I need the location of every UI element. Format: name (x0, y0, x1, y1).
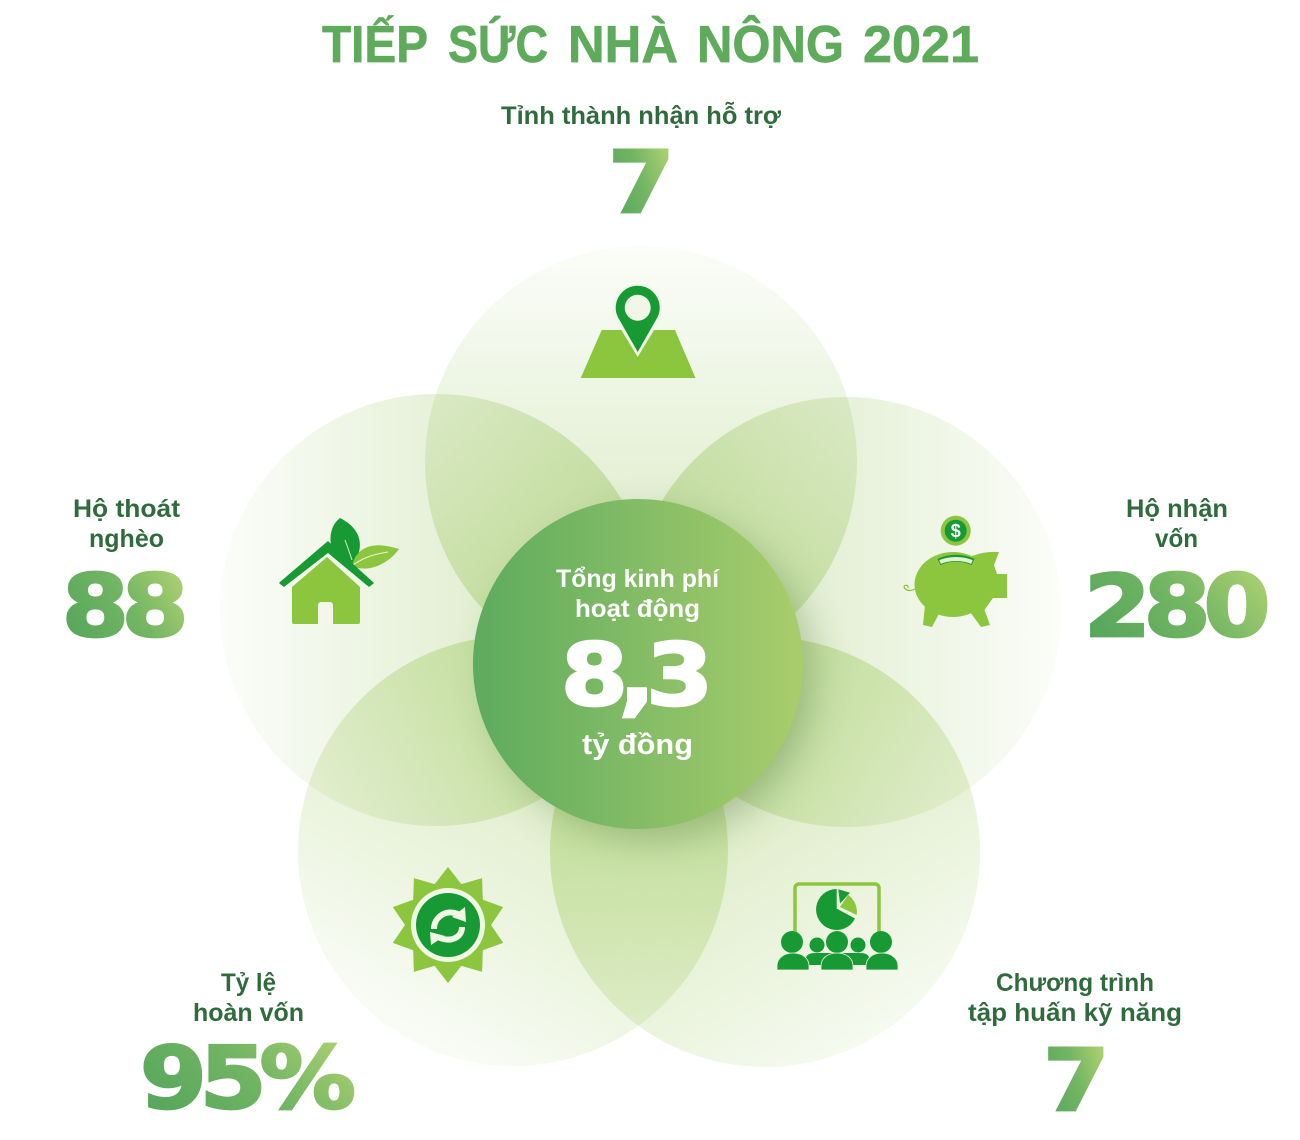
panel: total budget: hoạt động (575, 595, 700, 623)
stat: provinces supported: Tỉnh thành nhận hỗ trợ (501, 100, 781, 130)
icon: piggy bank with coin (904, 516, 1007, 627)
title: 2021 (863, 16, 979, 74)
stat: repayment rate: Tỷ lệ (221, 969, 276, 997)
title: TIẾP (322, 15, 428, 74)
stat: training programs (968, 969, 1182, 1131)
icon: sun with refresh arrows (393, 867, 503, 983)
stat: households receiving capital: 280 (1084, 558, 1266, 657)
stat: households out of poverty: nghèo (89, 525, 164, 553)
title: SỨC (448, 16, 548, 74)
stat: households out of poverty (62, 495, 183, 657)
stat: provinces supported (501, 100, 781, 233)
stat: training programs: Chương trình (996, 969, 1154, 997)
icon: training presentation (777, 884, 898, 970)
stat: repayment rate: hoàn vốn (193, 999, 304, 1027)
panel: total budget (473, 499, 803, 829)
stat: training programs: tập huấn kỹ năng (968, 999, 1182, 1027)
title (322, 15, 979, 74)
stat: households receiving capital (1084, 495, 1266, 657)
panel: total budget: tỷ đồng (582, 729, 693, 761)
icon: piggy bank with coin: $ (951, 521, 961, 541)
stat: households out of poverty: Hộ thoát (73, 495, 181, 523)
title: NHÀ (568, 16, 678, 74)
stat: households receiving capital: vốn (1155, 525, 1198, 553)
stat: repayment rate (140, 969, 354, 1129)
stat: training programs: 7 (1043, 1032, 1103, 1131)
center circle shadow (492, 518, 812, 838)
icon: map pin (581, 284, 696, 378)
stat: households receiving capital: Hộ nhận (1126, 495, 1228, 523)
stat: provinces supported: 7 (608, 134, 668, 233)
stat: repayment rate: 95% (140, 1030, 354, 1129)
icon: house with leaves (280, 518, 399, 624)
stat: households out of poverty: 88 (62, 558, 183, 657)
panel: total budget: Tổng kinh phí (556, 565, 720, 593)
title: NÔNG (697, 15, 844, 74)
panel: overlapping circles (220, 246, 1061, 1067)
panel: total budget: 8,3 (561, 627, 705, 726)
